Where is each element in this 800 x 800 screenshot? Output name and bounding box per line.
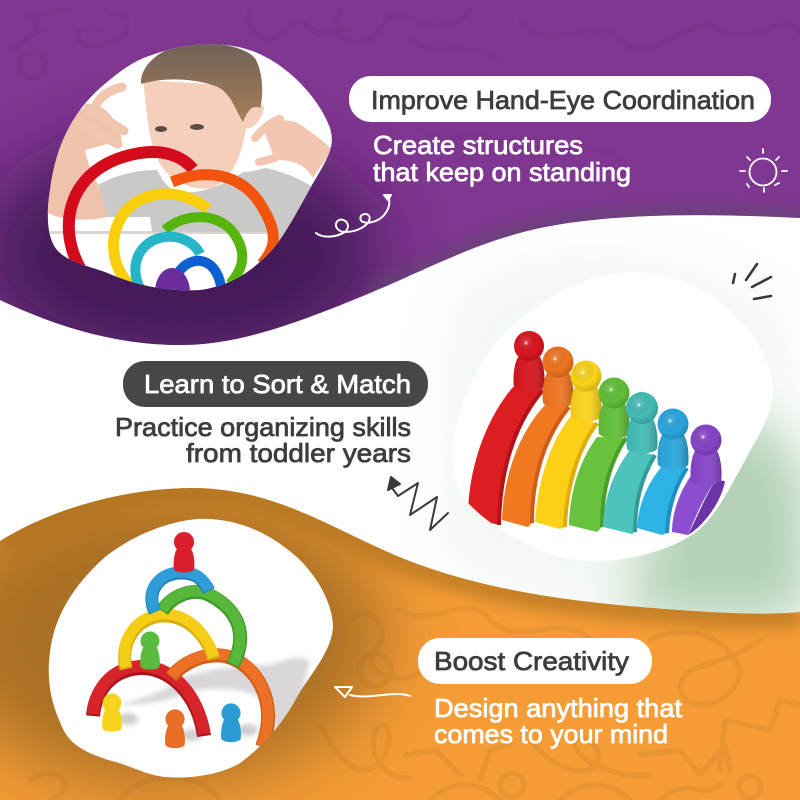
heading pill: creativity [418,638,652,684]
background squiggle pattern [10,10,800,160]
red peg [513,331,545,392]
orange arch [171,654,268,747]
blue peg [657,408,689,470]
heading pill: hand-eye: Improve Hand-Eye Coordination [371,85,755,115]
orange ring [172,175,273,264]
blue peg [221,703,241,742]
child's left arm and hand [46,87,124,220]
child's shirt [98,168,312,241]
yellow arch [535,417,597,529]
text: design anything [434,693,683,749]
photo blob: sorted rainbow with pegs [454,272,773,561]
dark upper edge [0,488,800,614]
green arch [162,591,240,665]
red arch [468,387,543,525]
text: design anything: Design anything that [434,693,683,723]
yellow arch [125,614,214,669]
table edge [50,231,270,234]
green peg [598,378,630,438]
teal peg [626,392,658,454]
photo blob: stacked rainbow tower [48,518,333,778]
red ring [69,152,193,268]
text: create structures: that keep on standing [373,157,631,187]
orange peg [165,709,185,748]
dark shadow around photo [0,485,385,785]
dark shadow around photo [0,140,380,370]
blue arch [152,572,209,612]
green ring [165,217,242,284]
child's right arm and hand [255,119,332,178]
blue ring [178,261,221,286]
text: practice organizing [115,412,411,468]
green arch [569,437,626,532]
child's head [143,80,264,189]
heading pill: creativity: Boost Creativity [434,646,629,676]
background squiggle pattern [30,608,800,800]
icon: sun [740,149,787,192]
muted lower edge [370,215,800,293]
text: create structures: Create structures [373,130,583,160]
photo blob: child stacking rainbow [48,44,332,290]
cast shadows [120,658,310,740]
icon: spark lines [733,264,771,299]
teal arch [603,450,655,534]
orange arch [502,403,569,527]
heading pill: sort and match: Learn to Sort & Match [144,369,411,399]
icon: curved arrow [335,687,410,697]
heading pill: hand-eye [349,76,771,122]
icon: curly arrow [316,195,391,237]
teal ring [135,237,200,288]
heading pill: sort and match [123,361,428,407]
orange peg [542,346,574,408]
red arch [93,666,204,736]
panel: orange band [0,480,800,800]
blue arch [637,465,687,535]
icon: zigzag arrow [388,477,448,530]
child's eyes [155,124,204,132]
purple peg [690,424,722,486]
text: design anything: comes to your mind [434,719,668,749]
purple arch [672,477,725,535]
child's hair [141,43,262,122]
yellow ring [114,194,208,285]
yellow peg [102,694,122,732]
purple semicircle [155,268,190,292]
text: create structures [373,130,631,187]
red peg [174,532,194,572]
text: practice organizing: from toddler years [186,438,411,468]
yellow peg [570,360,602,422]
green peg [140,632,160,670]
text: practice organizing: Practice organizing skills [115,412,411,442]
panel: purple band [0,0,800,370]
